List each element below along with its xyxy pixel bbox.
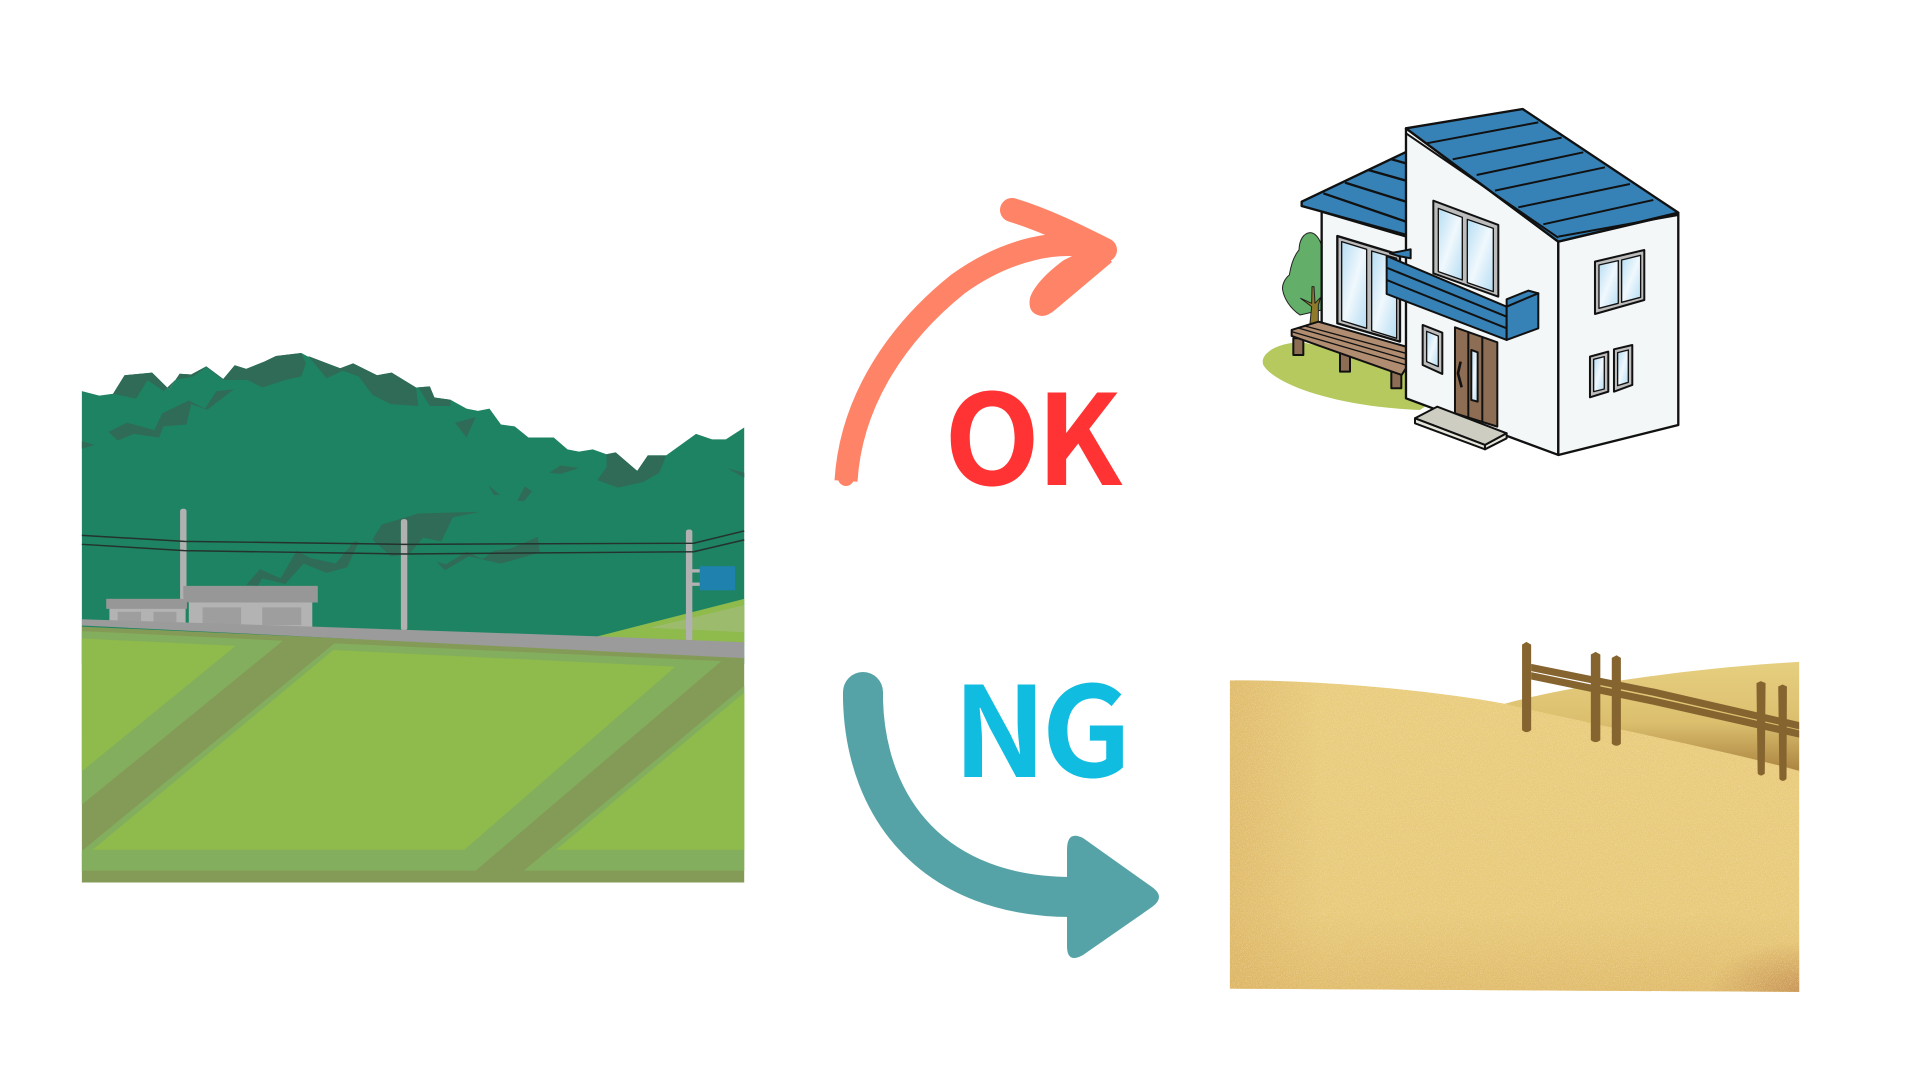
label: OK: OK — [944, 340, 1123, 521]
arrow: NG curved arrow to barren land — [863, 692, 1159, 958]
arrow: OK curved arrow to house — [838, 210, 1112, 486]
power lines — [82, 531, 744, 554]
front hill — [1230, 680, 1799, 992]
illustration: rice paddies and mountain — [82, 353, 744, 882]
front door — [1455, 327, 1497, 427]
mountain shadows — [82, 353, 744, 586]
right-hand hill — [595, 599, 744, 645]
illustration: barren land with fence — [1230, 642, 1799, 992]
paddy fields — [82, 627, 744, 882]
lawn — [1263, 342, 1430, 410]
back hill — [1505, 662, 1799, 773]
mountain — [82, 353, 744, 664]
main walls — [1406, 128, 1678, 455]
left wing — [1302, 152, 1407, 350]
small window by door — [1423, 325, 1442, 374]
tree — [1282, 233, 1322, 323]
main roof — [1406, 109, 1678, 242]
door step — [1415, 407, 1507, 449]
fence posts — [1522, 642, 1787, 781]
poles — [180, 509, 702, 641]
balcony — [1387, 249, 1538, 340]
side windows — [1590, 250, 1644, 397]
sign — [700, 566, 735, 590]
fence rails — [1531, 664, 1799, 738]
buildings — [106, 586, 318, 627]
label: NG: NG — [953, 632, 1126, 813]
deck — [1292, 322, 1406, 388]
road — [82, 619, 744, 658]
illustration: house — [1263, 109, 1678, 455]
upper window — [1433, 201, 1498, 297]
